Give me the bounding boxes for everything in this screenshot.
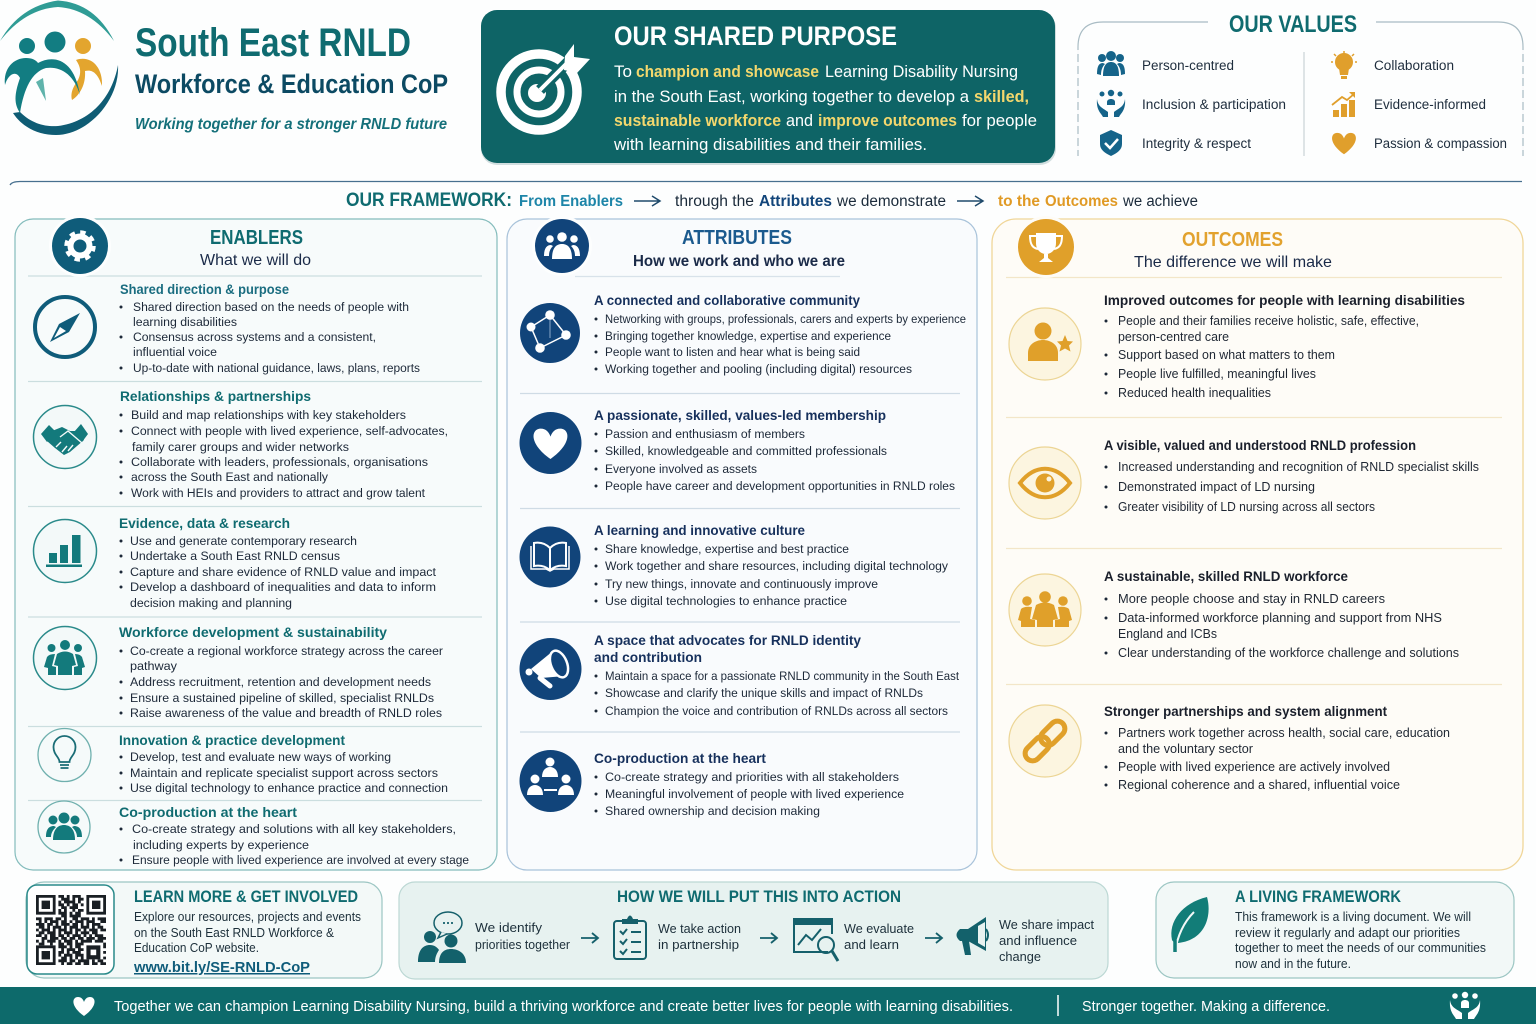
- attribute: co-production: Co-production at the heart: [594, 751, 766, 767]
- purpose statement: sustainable workforce: [614, 111, 781, 130]
- bullets: Meaningful involvement of people with lived experience: [605, 787, 904, 801]
- footer strapline: Stronger together. Making a difference.: [1082, 998, 1330, 1015]
- heading: OUR VALUES: [1229, 11, 1357, 38]
- value: inclusion and participation: [1097, 90, 1286, 117]
- bullets: [1104, 313, 1419, 400]
- purpose statement: improve outcomes: [818, 111, 957, 130]
- step: evaluate: We evaluate: [844, 921, 914, 936]
- enabler: evidence: [34, 516, 437, 610]
- bullets: [120, 300, 420, 375]
- bullets: Develop, test and evaluate new ways of working: [130, 750, 391, 764]
- step: share impact: and influence: [999, 933, 1077, 948]
- bullets: People want to listen and hear what is being said: [605, 345, 860, 359]
- framework strapline: Outcomes: [1045, 193, 1118, 210]
- panel: our shared purpose: [481, 10, 1056, 165]
- bullets: Connect with people with lived experience, self-advocates,: [131, 424, 448, 438]
- bullets: [594, 427, 955, 493]
- panel: enablers: [15, 215, 497, 870]
- bullets: Co-create strategy and solutions with all key stakeholders,: [132, 822, 456, 836]
- icon: chain links: [1009, 705, 1081, 777]
- description: together to meet the needs of our communities: [1235, 940, 1486, 955]
- bullets: Raise awareness of the value and breadth of RNLD roles: [130, 706, 442, 720]
- heading: A LIVING FRAMEWORK: [1235, 887, 1402, 906]
- bullets: Networking with groups, professionals, carers and experts by experience: [605, 312, 966, 326]
- bullets: Use digital technologies to enhance practice: [605, 594, 847, 608]
- bullets: Increased understanding and recognition of RNLD specialist skills: [1118, 459, 1479, 474]
- bullets: Shared ownership and decision making: [605, 804, 820, 818]
- title: [135, 21, 448, 99]
- arrow: [634, 196, 660, 206]
- bullets: Co-create strategy and priorities with all stakeholders: [605, 770, 899, 784]
- step: take action: [614, 916, 741, 959]
- attribute: co-production: [520, 750, 904, 818]
- outcome: improved outcomes: Improved outcomes for people with learning disabilities: [1104, 293, 1465, 309]
- bullets: Use and generate contemporary research: [130, 534, 357, 548]
- icon: three people: [1009, 574, 1081, 646]
- panel: our values: [1078, 11, 1523, 156]
- bullets: Build and map relationships with key stakeholders: [131, 408, 406, 422]
- bullets: and the voluntary sector: [1118, 741, 1254, 756]
- description: [134, 909, 361, 955]
- arrow: [581, 933, 598, 943]
- purpose statement: To: [614, 62, 632, 81]
- panel: attributes: [507, 216, 977, 870]
- icon: compass: [35, 297, 95, 357]
- bullets: Undertake a South East RNLD census: [130, 549, 340, 563]
- icon: person with star: [1009, 308, 1081, 380]
- description: now and in the future.: [1235, 956, 1351, 971]
- outcome: visible profession: [1009, 438, 1479, 519]
- icon: people group: [532, 216, 592, 276]
- value: collaboration: [1331, 51, 1454, 79]
- bullets: Support based on what matters to them: [1118, 347, 1335, 362]
- description: [1235, 909, 1486, 971]
- bullets: Demonstrated impact of LD nursing: [1118, 479, 1315, 494]
- framework strapline: to the: [998, 193, 1040, 210]
- bullets: [594, 312, 966, 376]
- purpose statement: and: [786, 111, 813, 130]
- icon: light bulb: [38, 728, 91, 782]
- bullets: People and their families receive holistic, safe, effective,: [1118, 313, 1419, 328]
- enabler: shared direction: Shared direction & purpose: [120, 282, 289, 298]
- bullets: [1104, 725, 1450, 792]
- heading: HOW WE WILL PUT THIS INTO ACTION: [617, 887, 901, 906]
- attribute: passionate membership: A passionate, skilled, values-led membership: [594, 408, 886, 424]
- arrow: [925, 933, 942, 943]
- enabler: co-production: Co-production at the heart: [119, 805, 297, 821]
- icon: open book: [520, 526, 580, 588]
- description: Explore our resources, projects and events: [134, 909, 361, 924]
- framework strapline: we demonstrate: [836, 193, 946, 210]
- arrow: [760, 933, 777, 943]
- outcome: stronger partnerships: Stronger partnerships and system alignment: [1104, 704, 1387, 720]
- step: share impact: We share impact: [999, 917, 1094, 932]
- icon: heart: [520, 412, 582, 474]
- bullets: People with lived experience are actively involved: [1118, 759, 1390, 774]
- bullets: Skilled, knowledgeable and committed professionals: [605, 444, 887, 458]
- attribute: connected community: [520, 293, 966, 376]
- bullets: [594, 669, 960, 718]
- bullets: Reduced health inequalities: [1118, 385, 1271, 400]
- value: evidence-informed: [1332, 92, 1486, 117]
- enabler: evidence: Evidence, data & research: [119, 516, 290, 532]
- enabler: workforce: [34, 625, 443, 720]
- title: Workforce & Education CoP: [135, 69, 448, 99]
- framework strapline: From Enablers: [519, 193, 623, 210]
- icon: group: [38, 801, 90, 853]
- heading: OUTCOMES: [1182, 229, 1283, 251]
- logo: [0, 0, 118, 135]
- bullets: Shared direction based on the needs of people with: [133, 300, 409, 314]
- enabler: innovation: [38, 728, 448, 795]
- bullets: More people choose and stay in RNLD careers: [1118, 591, 1385, 606]
- purpose statement: for people: [962, 111, 1037, 130]
- bullets: Regional coherence and a shared, influential voice: [1118, 777, 1400, 792]
- icon: eye: [1009, 447, 1081, 519]
- outcome: stronger partnerships: [1009, 704, 1450, 792]
- bullets: Consensus across systems and a consistent,: [133, 330, 376, 344]
- bullets: Try new things, innovate and continuously improve: [605, 577, 878, 591]
- step: identify priorities: We identify: [475, 920, 542, 935]
- bullets: decision making and planning: [130, 596, 292, 610]
- framework strapline: OUR FRAMEWORK:: [346, 190, 512, 211]
- panel: how we will put this into action: [399, 882, 1108, 979]
- outcome: sustainable workforce: A sustainable, skilled RNLD workforce: [1104, 569, 1348, 585]
- bullets: People live fulfilled, meaningful lives: [1118, 366, 1316, 381]
- icon: leaf: [1171, 897, 1209, 952]
- bullets: Clear understanding of the workforce challenge and solutions: [1118, 645, 1459, 660]
- enabler: innovation: Innovation & practice development: [119, 733, 345, 749]
- bullets: [1104, 459, 1479, 514]
- value: evidence-informed: Evidence-informed: [1374, 97, 1486, 113]
- enabler: relationships: Relationships & partnerships: [120, 389, 311, 405]
- bullets: pathway: [130, 659, 178, 673]
- heading: LEARN MORE & GET INVOLVED: [134, 887, 358, 906]
- title: South East RNLD: [135, 21, 411, 65]
- bullets: People have career and development opportunities in RNLD roles: [605, 479, 955, 493]
- bullets: family carer groups and wider networks: [132, 440, 349, 454]
- QR code: [27, 885, 114, 974]
- enabler: shared direction: [35, 282, 420, 375]
- value: collaboration: Collaboration: [1374, 58, 1454, 74]
- framework strapline: we achieve: [1122, 193, 1198, 210]
- panel: a living framework: [1156, 882, 1514, 978]
- bullets: Develop a dashboard of inequalities and data to inform: [130, 580, 436, 594]
- value: person-centred: [1097, 51, 1234, 76]
- attribute: connected community: A connected and collaborative community: [594, 293, 860, 309]
- bullets: Maintain a space for a passionate RNLD community in the South East: [605, 669, 960, 683]
- step: share impact: [956, 917, 1094, 964]
- attribute: learning culture: [520, 523, 949, 608]
- bullets: England and ICBs: [1118, 626, 1217, 641]
- enabler: workforce: Workforce development & sustainability: [119, 625, 387, 641]
- bullets: Passion and enthusiasm of members: [605, 427, 805, 441]
- attribute: advocacy space: [520, 633, 960, 718]
- outcome: sustainable workforce: [1009, 569, 1459, 660]
- bullets: Showcase and clarify the unique skills and impact of RNLDs: [605, 686, 923, 700]
- bullets: Co-create a regional workforce strategy across the career: [130, 644, 443, 658]
- description: on the South East RNLD Workforce &: [134, 925, 334, 940]
- step: evaluate: and learn: [844, 937, 899, 952]
- outcome: visible profession: A visible, valued and understood RNLD profession: [1104, 438, 1416, 454]
- bullets: Ensure a sustained pipeline of skilled, specialist RNLDs: [130, 691, 434, 705]
- bullets: Champion the voice and contribution of RNLDs across all sectors: [605, 704, 948, 718]
- icon: megaphone: [520, 638, 582, 700]
- icon: handshake: [34, 406, 96, 468]
- purpose statement: [613, 62, 1037, 154]
- bullets: Work with HEIs and providers to attract and grow talent: [131, 486, 426, 500]
- tagline: Working together for a stronger RNLD future: [135, 116, 447, 133]
- icon: people meeting: [520, 750, 582, 812]
- icon: gear: [49, 215, 111, 277]
- purpose statement: with learning disabilities and their families.: [613, 135, 927, 154]
- bullets: Ensure people with lived experience are involved at every stage: [132, 853, 469, 867]
- bullets: Bringing together knowledge, expertise and experience: [605, 329, 891, 343]
- bullets: [594, 770, 904, 818]
- bullets: Share knowledge, expertise and best practice: [605, 542, 849, 556]
- bullets: Everyone involved as assets: [605, 462, 757, 476]
- attribute: passionate membership: [520, 408, 955, 493]
- step: take action: in partnership: [658, 937, 739, 952]
- bullets: [120, 822, 469, 867]
- step: take action: We take action: [658, 921, 741, 936]
- value: passion and compassion: [1332, 133, 1507, 154]
- subheading: The difference we will make: [1134, 254, 1332, 271]
- purpose statement: skilled,: [974, 87, 1029, 106]
- step: evaluate: [794, 919, 914, 961]
- step: share impact: change: [999, 949, 1041, 964]
- panel: learn more: [26, 882, 382, 978]
- enabler: co-production: [38, 801, 469, 867]
- purpose statement: champion and showcase: [636, 62, 819, 81]
- value: inclusion and participation: Inclusion & participation: [1142, 97, 1286, 113]
- bullets: Work together and share resources, including digital technology: [605, 559, 949, 573]
- icon: hands and people: [1450, 992, 1480, 1019]
- bullets: Up-to-date with national guidance, laws, plans, reports: [133, 361, 420, 375]
- subheading: How we work and who we are: [633, 253, 845, 270]
- purpose statement: in the South East, working together to develop a: [614, 87, 970, 106]
- value: integrity and respect: [1100, 130, 1251, 156]
- value: passion and compassion: Passion & compassion: [1374, 136, 1507, 152]
- bullets: [1104, 591, 1459, 660]
- framework strapline: Attributes: [759, 193, 832, 210]
- bullets: across the South East and nationally: [131, 470, 329, 484]
- enabler: relationships: [34, 389, 448, 500]
- heading: OUR SHARED PURPOSE: [614, 21, 897, 51]
- bullets: Address recruitment, retention and development needs: [130, 675, 431, 689]
- attribute: learning culture: A learning and innovative culture: [594, 523, 805, 539]
- icon: trophy: [1015, 216, 1077, 278]
- icon: network: [520, 303, 580, 363]
- value: integrity and respect: Integrity & respect: [1142, 136, 1251, 152]
- icon: target and arrow: [501, 44, 590, 130]
- bullets: Collaborate with leaders, professionals, organisations: [131, 455, 428, 469]
- bullets: [120, 644, 443, 720]
- bullets: learning disabilities: [133, 315, 237, 329]
- bullets: [594, 542, 949, 608]
- attribute: advocacy space: and contribution: [594, 650, 702, 666]
- step: identify priorities: [418, 912, 571, 963]
- footer message: Together we can champion Learning Disability Nursing, build a thriving workforce and create better lives for people with learning disabilities.: [114, 998, 1013, 1015]
- bullets: [120, 408, 448, 500]
- panel: outcomes: [992, 216, 1523, 870]
- bullets: person-centred care: [1118, 329, 1229, 344]
- description: This framework is a living document. We will: [1235, 909, 1471, 924]
- bullets: [120, 750, 448, 795]
- step: identify priorities: priorities together: [475, 937, 571, 952]
- bullets: influential voice: [133, 345, 217, 359]
- outcome: improved outcomes: [1009, 293, 1465, 400]
- bullets: Use digital technology to enhance practice and connection: [130, 781, 448, 795]
- bullets: Data-informed workforce planning and support from NHS: [1118, 610, 1442, 625]
- framework strapline: through the: [675, 193, 754, 210]
- bullets: [120, 534, 437, 610]
- heading: ATTRIBUTES: [682, 227, 792, 249]
- icon: heart: [73, 997, 95, 1016]
- bullets: Capture and share evidence of RNLD value and impact: [130, 565, 437, 579]
- description: Education CoP website.: [134, 940, 259, 955]
- value: person-centred: Person-centred: [1142, 58, 1234, 74]
- arrow: [957, 196, 983, 206]
- bullets: Working together and pooling (including digital) resources: [605, 362, 912, 376]
- bullets: including experts by experience: [133, 838, 309, 852]
- subheading: What we will do: [200, 252, 311, 269]
- footer band: [0, 987, 1536, 1024]
- description: review it regularly and adapt our priorities: [1235, 925, 1460, 940]
- heading: ENABLERS: [210, 227, 303, 249]
- icon: three standing people: [34, 626, 96, 690]
- attribute: advocacy space: A space that advocates for RNLD identity: [594, 633, 861, 649]
- framework strapline: [346, 190, 1198, 211]
- bullets: Maintain and replicate specialist support across sectors: [130, 766, 438, 780]
- purpose statement: Learning Disability Nursing: [825, 62, 1018, 81]
- link: www.bit.ly/SE-RNLD-CoP: [133, 959, 310, 976]
- icon: bar chart: [34, 520, 96, 582]
- bullets: Greater visibility of LD nursing across all sectors: [1118, 499, 1375, 514]
- bullets: Partners work together across health, social care, education: [1118, 725, 1450, 740]
